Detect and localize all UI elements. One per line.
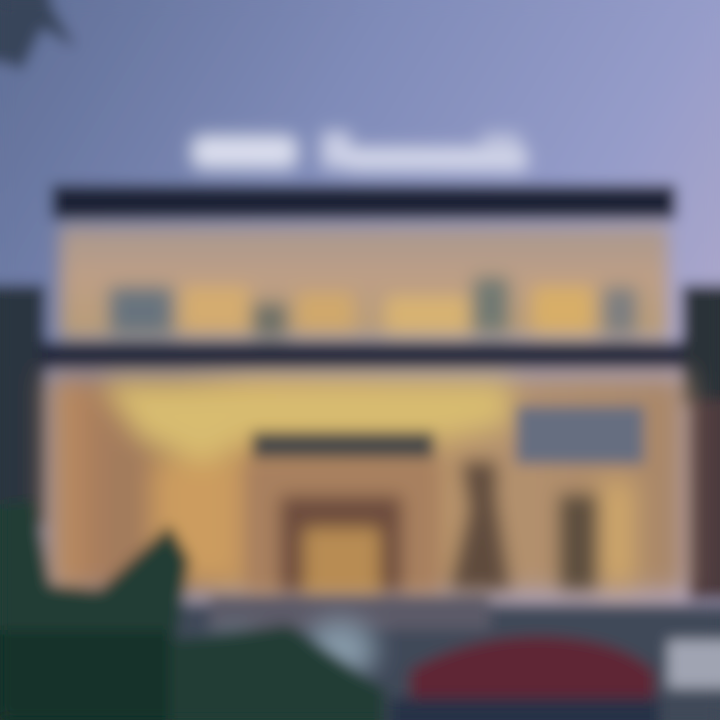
lower floor facade — [48, 374, 688, 594]
upper floor dark silhouettes — [110, 278, 636, 336]
upper floor glazing — [60, 226, 668, 338]
warm ceiling glow — [100, 382, 634, 585]
side trees and dark edges — [0, 285, 720, 600]
entrance portal — [245, 458, 440, 594]
mid floor band — [40, 342, 684, 368]
parked cars pale — [207, 620, 720, 688]
building — [40, 185, 688, 594]
ground and street — [0, 596, 720, 720]
foreground foliage — [0, 500, 385, 720]
parked red car — [390, 636, 660, 720]
facade trees and columns — [450, 462, 596, 590]
roof band — [52, 185, 676, 219]
entrance canopy — [252, 432, 434, 458]
rooftop sign — [192, 132, 527, 170]
palm fronds top left — [0, 0, 76, 70]
grey window panel — [516, 406, 644, 464]
